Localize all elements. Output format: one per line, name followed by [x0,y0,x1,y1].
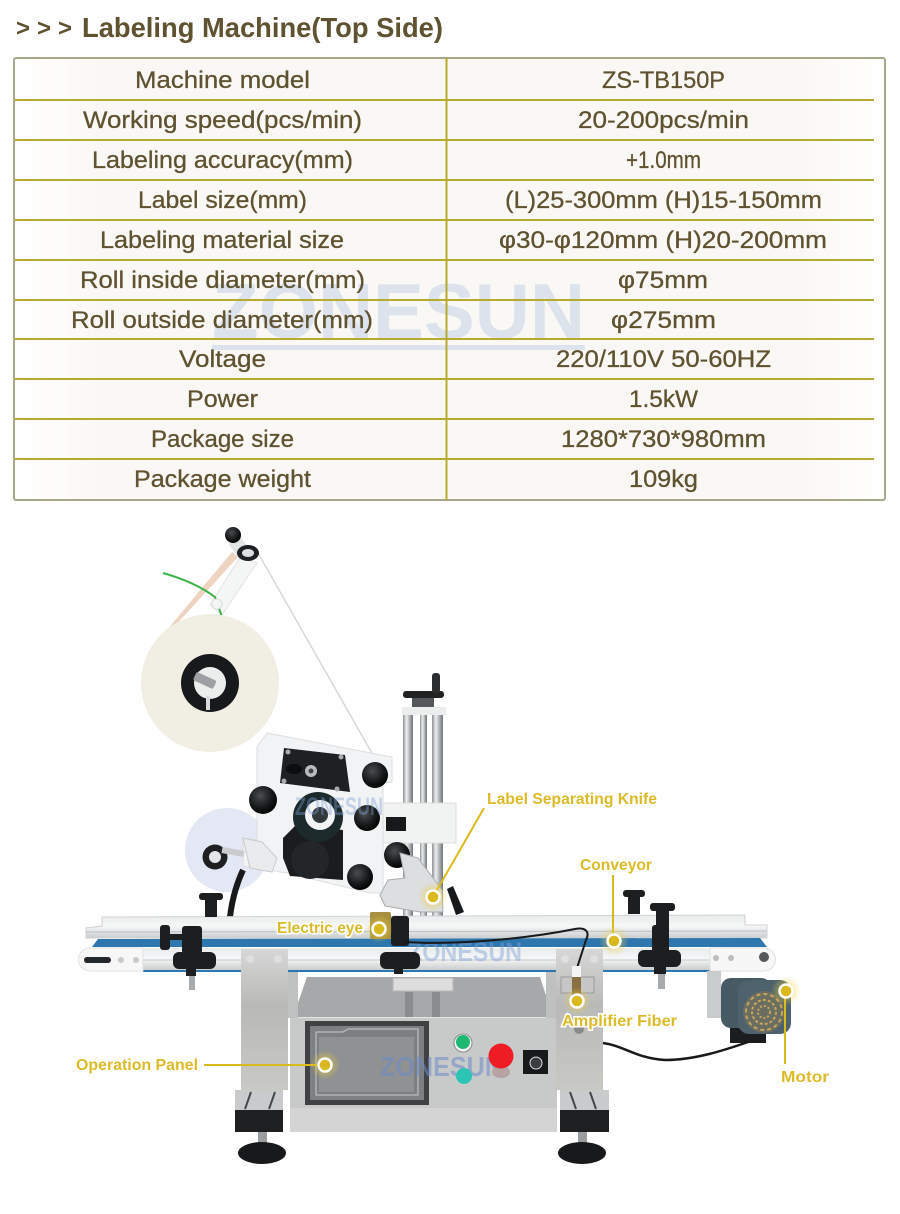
conveyor [78,915,776,972]
control buttons [454,1034,548,1084]
table values: 20-200pcs/min [578,107,749,134]
machine illustration [78,527,791,1164]
table values: ZS-TB150P [602,67,725,94]
labeling head plate [202,733,464,915]
watermark: head: ZONESUN [295,793,383,821]
callout: Amplifier Fiber: Amplifier Fiber [562,1013,677,1030]
table values: +1.0mm [626,147,701,174]
table labels: Labeling material size [100,227,344,254]
callout: Label Separating Knife [418,791,657,912]
tension knobs [362,762,388,788]
watermark: conveyor: ZONESUN [408,937,522,967]
table labels: Voltage [179,346,266,373]
callout: Conveyor: Conveyor [580,857,652,874]
column with hand wheel [383,673,456,920]
clamp left [160,925,170,950]
lower motor block [283,825,343,880]
callout: Label Separating Knife: Label Separating Knife [487,791,657,808]
callout: Operation Panel [76,1050,340,1080]
title: >>> [16,15,72,42]
table values: 1280*730*980mm [561,426,766,453]
fiber cable [405,929,588,968]
label roll [141,614,279,752]
sensor bracket electric eye [370,912,391,939]
callout: Motor [771,976,829,1086]
table labels [71,67,373,493]
table labels: Working speed(pcs/min) [83,107,362,134]
watermark: ZONESUN large: ZONESUN [212,267,585,355]
left end plate [78,948,143,971]
motor [707,971,791,1043]
table values: 220/110V 50-60HZ [556,346,771,373]
table labels: Package weight [134,466,311,493]
machine body [290,977,557,1132]
watermark: panel: ZONESUN [380,1051,503,1082]
feet [235,1090,609,1164]
callout: Operation Panel: Operation Panel [76,1057,198,1074]
title: Labeling Machine(Top Side) [82,12,443,43]
table values: 109kg [629,466,698,493]
table values [499,67,827,493]
table values: φ275mm [611,307,716,334]
table labels: Label size(mm) [138,187,307,214]
table labels: Roll inside diameter(mm) [80,267,365,294]
table values: 1.5kW [629,386,699,413]
left and right legs [241,949,603,1090]
table values: (L)25-300mm (H)15-150mm [505,187,822,214]
callout: Amplifier Fiber [562,987,677,1030]
callout: Conveyor [580,857,652,956]
table labels: Package size [151,426,294,453]
table values: φ30-φ120mm (H)20-200mm [499,227,827,254]
table labels: Power [187,386,258,413]
label peeling plate [380,853,443,912]
guide roller [202,844,228,870]
callout: Electric eye [277,915,393,943]
table labels: Labeling accuracy(mm) [92,147,353,174]
callout: Motor: Motor [781,1069,829,1086]
touch screen [305,1021,429,1105]
table values: φ75mm [618,267,708,294]
amplifier fiber sensor [561,966,594,1034]
top knobs and clamps [160,890,681,976]
black hose [230,870,243,917]
table labels: Machine model [135,67,310,94]
lower label roll disc [185,808,269,892]
right end plate [710,948,776,971]
table labels: Roll outside diameter(mm) [71,307,373,334]
roll arm [163,527,259,630]
callout: Electric eye: Electric eye [277,920,363,937]
blue belt [92,938,767,947]
clamp right [652,925,669,955]
specification table [14,58,885,500]
thin label web line [258,553,373,755]
power cable [603,1042,748,1060]
top black block [280,748,350,792]
clamp center [391,916,409,946]
